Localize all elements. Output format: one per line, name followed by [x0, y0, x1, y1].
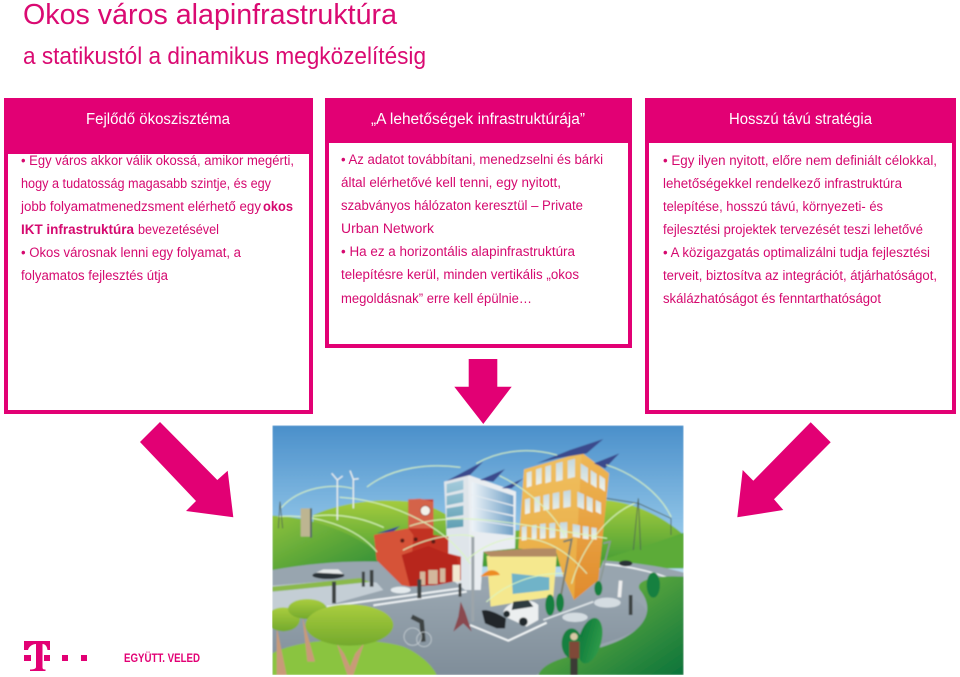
yellow shop [487, 556, 557, 607]
panel 1 body text: folyamatos fejlesztés útja [21, 268, 168, 283]
panel 1 body text: jobb folyamatmenedzsment elérhető egy [20, 199, 261, 214]
trees [277, 617, 364, 675]
illustration: smart city [267, 425, 684, 675]
panel: Hosszú távú stratégia [645, 98, 956, 412]
panel 3 body text: skálázhatóságot és fenntarthatóságot [663, 291, 881, 306]
panel 3 body text: terveit, biztosítva az integrációt, átjárhatóságot, [663, 268, 937, 283]
arrow: centre down [454, 359, 512, 424]
people [334, 570, 631, 642]
panel 3 body text: • A közigazgatás optimalizálni tudja fejlesztési [663, 245, 930, 260]
panel 2 body text: • Az adatot továbbítani, menedzselni és bárki [341, 152, 603, 167]
panel 1 body text: hogy a tudatosság magasabb szintje, és egy [21, 176, 271, 191]
yellow-orange building [518, 453, 609, 600]
panel 3 body text: • Egy ilyen nyitott, előre nem definiált célokkal, [663, 153, 937, 168]
panel 2 body text: megoldásnak” erre kell épülnie… [341, 291, 532, 306]
panel 3 body text: telepítése, hosszú távú, környezeti- és [663, 199, 883, 214]
logo: Telekom T [24, 641, 87, 671]
solar panels [377, 439, 619, 534]
panel 2 body text: Urban Network [341, 221, 434, 236]
vehicles [503, 600, 538, 627]
panel 1 body text: okos [263, 199, 293, 214]
panel: A lehetőségek infrastruktúrája [325, 98, 632, 346]
panel 2 heading: „A lehetőségek infrastruktúrája” [371, 111, 585, 128]
red building [374, 499, 461, 587]
light pools on pavement [391, 587, 411, 593]
panel 3 body text: fejlesztési projektek tervezését teszi lehetővé [663, 222, 923, 237]
arrow: left diagonal [140, 422, 233, 517]
panel 2 body text [341, 152, 603, 306]
parking marks [470, 623, 547, 641]
grass corners [538, 576, 684, 675]
roads [272, 561, 684, 675]
glass building [444, 475, 516, 590]
panel 1 body text: • Okos városnak lenni egy folyamat, a [21, 245, 241, 260]
panel 1 body text: bevezetésével [138, 222, 219, 237]
panel 1 body text [20, 153, 294, 283]
panel 2 body text: • Ha ez a horizontális alapinfrastruktúra [341, 244, 575, 259]
panel 2 body text: telepítésre kerül, minden vertikális „okos [341, 267, 579, 282]
hills [313, 500, 684, 567]
wind turbines and pylons [332, 471, 359, 520]
panel 3 body text [663, 153, 937, 306]
panel 1 body text: IKT infrastruktúra [21, 222, 134, 237]
panel 1 heading: Fejlődő ökoszisztéma [86, 111, 230, 128]
arrow: right diagonal [737, 422, 831, 517]
slogan: EGYÜTT. VELED [124, 652, 200, 665]
panel 3 body text: lehetőségekkel rendelkező infrastruktúra [663, 176, 902, 191]
subtitle: a statikustól a dinamikus megközelítésig [23, 43, 426, 70]
network arcs [278, 451, 671, 602]
panel 1 body text: • Egy város akkor válik okossá, amikor megérti, [21, 153, 294, 168]
panel 3 heading: Hosszú távú stratégia [729, 111, 872, 128]
panel 2 body text: szabványos hálózaton keresztül – Private [341, 198, 583, 213]
panel 2 body text: által elérhetővé kell tenni, egy nyitott, [341, 175, 561, 190]
panel: Fejlődő ökoszisztéma [4, 98, 313, 412]
